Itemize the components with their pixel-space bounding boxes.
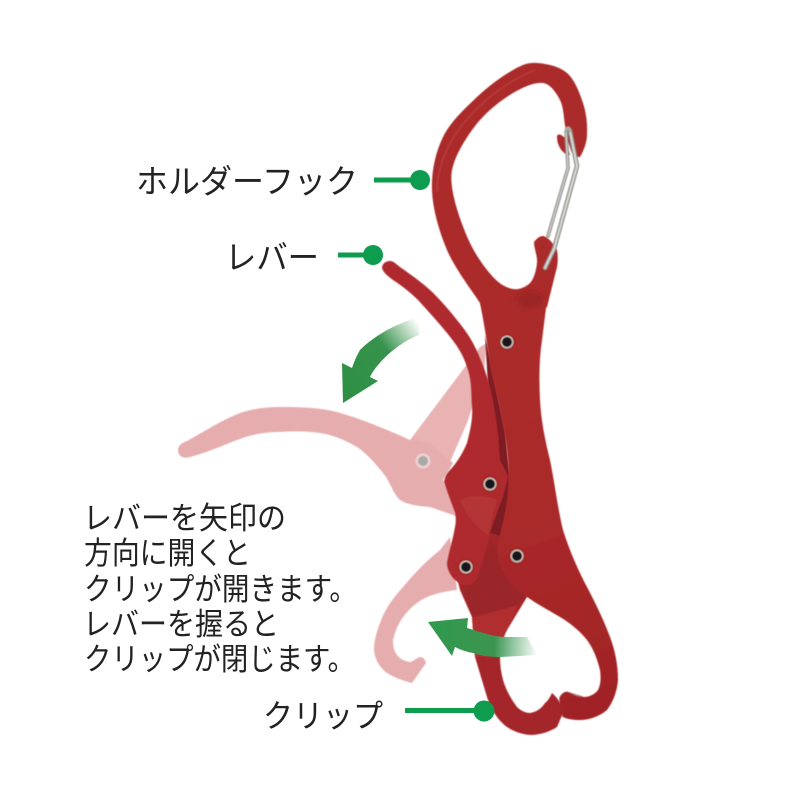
dent shadow at neck	[517, 292, 543, 308]
body rivet lower	[508, 548, 526, 564]
label: clip: クリップ	[263, 698, 383, 734]
leader: holder hook	[374, 170, 430, 190]
label: lever	[225, 239, 383, 276]
ghost lever arm	[178, 407, 456, 516]
lever rivet lower	[458, 558, 474, 576]
body plate	[480, 292, 618, 720]
lever rivet middle	[482, 476, 498, 492]
ghost rivet	[416, 454, 430, 468]
lever	[382, 261, 508, 585]
ghost hook band	[410, 343, 487, 462]
ghost lever: open position	[178, 343, 487, 683]
arrow: lever opens	[342, 317, 419, 403]
wire gate	[545, 128, 577, 268]
ghost clip	[374, 537, 457, 683]
instruction text: レバーを握ると	[83, 607, 279, 642]
instruction text: クリップが閉じます。	[84, 642, 355, 677]
instruction text: 方向に開くと	[84, 536, 251, 571]
hook latch nub	[557, 134, 570, 155]
body rivet top	[498, 334, 516, 350]
label: lever: レバー	[225, 239, 319, 276]
arrow: clip closes	[428, 618, 537, 657]
jaw shadow area	[462, 540, 527, 617]
instruction text: クリップが開きます。	[84, 572, 357, 607]
hook highlight	[437, 70, 535, 192]
instruction text	[83, 501, 357, 677]
lever shading	[460, 496, 497, 535]
hook frame	[432, 63, 587, 330]
jaw lighter fold	[472, 605, 518, 657]
clip jaw: center piece	[455, 530, 563, 735]
heart tip	[560, 692, 583, 717]
dark gap behind lever and body	[475, 335, 512, 590]
leader: lever	[338, 245, 383, 265]
leader: clip	[405, 700, 494, 722]
label: holder hook: ホルダーフック	[136, 163, 358, 200]
instruction text: レバーを矢印の	[83, 501, 286, 536]
holder hook	[432, 63, 587, 330]
label: clip	[263, 698, 494, 734]
